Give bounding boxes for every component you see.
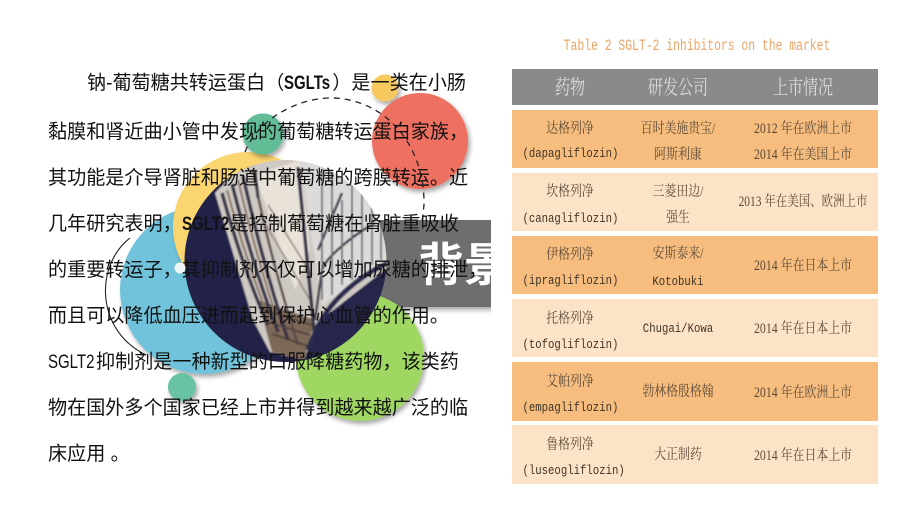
banner: gray band with clipped title: 背景	[418, 239, 510, 291]
row: luseogliflozin: 大正制药	[654, 447, 702, 463]
row: dapagliflozin: 阿斯利康	[654, 147, 702, 163]
body paragraph: 钠-葡萄糖共转运蛋白（ ）是一类在小肠	[87, 73, 466, 94]
row: dapagliflozin	[512, 110, 878, 168]
table header: 研发公司	[648, 77, 708, 99]
table: SGLT-2 inhibitors	[512, 69, 878, 484]
circle: large green	[296, 293, 424, 421]
row: luseogliflozin	[512, 425, 878, 484]
row: ipragliflozin: 安斯泰来/	[653, 246, 703, 262]
row: dapagliflozin: 2012 年在欧洲上市	[754, 121, 852, 137]
body paragraph	[48, 72, 487, 465]
body paragraph: 黏膜和肾近曲小管中发现的葡萄糖转运蛋白家族，	[48, 122, 468, 143]
body paragraph: 而且可以降低血压进而起到保护心血管的作用。	[48, 306, 449, 327]
table header: 上市情况	[773, 77, 833, 99]
body paragraph: 的重要转运子，其抑制剂不仅可以增加尿糖的排泄，	[48, 260, 487, 281]
row: empagliflozin	[512, 362, 878, 421]
small white dot	[174, 262, 186, 274]
circle: blue	[120, 206, 288, 374]
circle: big yellow	[173, 152, 323, 302]
row: canagliflozin: (canagliflozin)	[522, 211, 618, 226]
body paragraph: 床应用 。	[48, 444, 130, 465]
circle: small yellow	[372, 74, 398, 102]
body paragraph: SGLT2	[48, 352, 94, 373]
row: dapagliflozin: 达格列净	[546, 121, 594, 137]
row: dapagliflozin: 百时美施贵宝/	[641, 121, 715, 137]
circle: large red	[372, 93, 468, 189]
row: tofogliflozin: (tofogliflozin)	[522, 337, 618, 352]
body paragraph: SGLT2	[182, 214, 229, 235]
row: ipragliflozin: 2014 年在日本上市	[754, 258, 852, 274]
dashed arc	[245, 98, 424, 222]
row: luseogliflozin: 2014 年在日本上市	[754, 448, 852, 464]
solid arc	[105, 238, 146, 355]
row: canagliflozin: 坎格列净	[546, 184, 594, 200]
row: tofogliflozin	[512, 299, 878, 357]
row: empagliflozin: 艾帕列净	[546, 374, 594, 390]
decorative circles and photo cluster	[104, 74, 491, 427]
row: luseogliflozin: 鲁格列净	[546, 437, 594, 453]
row: canagliflozin	[512, 173, 878, 231]
row: tofogliflozin: 2014 年在日本上市	[754, 321, 852, 337]
circle: teal bottom	[168, 373, 196, 401]
row: empagliflozin: 勃林格殷格翰	[642, 384, 714, 400]
table header: 药物	[555, 77, 585, 99]
body paragraph: SGLTs	[284, 73, 330, 94]
table header	[512, 69, 878, 105]
row: ipragliflozin: Kotobuki	[652, 274, 704, 289]
row: ipragliflozin: (ipragliflozin)	[522, 273, 618, 288]
banner: gray band with clipped title	[378, 220, 491, 313]
row: dapagliflozin: 2014 年在美国上市	[754, 147, 852, 163]
row: tofogliflozin: Chugai/Kowa	[643, 321, 713, 336]
body paragraph: 抑制剂是一种新型的口服降糖药物，该类药	[96, 352, 459, 373]
photo circle	[184, 160, 386, 362]
row: canagliflozin: 强生	[666, 210, 690, 226]
row: canagliflozin: 2013 年在美国、欧洲上市	[739, 194, 867, 210]
row: ipragliflozin: 伊格列净	[546, 247, 594, 263]
circle: teal top	[242, 114, 284, 154]
row: empagliflozin: (empagliflozin)	[522, 400, 618, 415]
body paragraph: 其功能是介导肾脏和肠道中葡萄糖的跨膜转运。近	[48, 168, 468, 189]
body paragraph: 几年研究表明， 是控制葡萄糖在肾脏重吸收	[48, 214, 459, 235]
row: ipragliflozin	[512, 236, 878, 294]
row: luseogliflozin: (luseogliflozin)	[522, 463, 625, 478]
row: dapagliflozin: (dapagliflozin)	[522, 146, 618, 161]
body paragraph: 物在国外多个国家已经上市并得到越来越广泛的临	[48, 398, 468, 419]
row: canagliflozin: 三菱田边/	[653, 184, 703, 200]
row: empagliflozin: 2014 年在欧洲上市	[754, 385, 852, 401]
row: tofogliflozin: 托格列净	[546, 311, 594, 327]
table title: Table 2 SGLT-2 inhibitors on the market	[564, 37, 830, 55]
